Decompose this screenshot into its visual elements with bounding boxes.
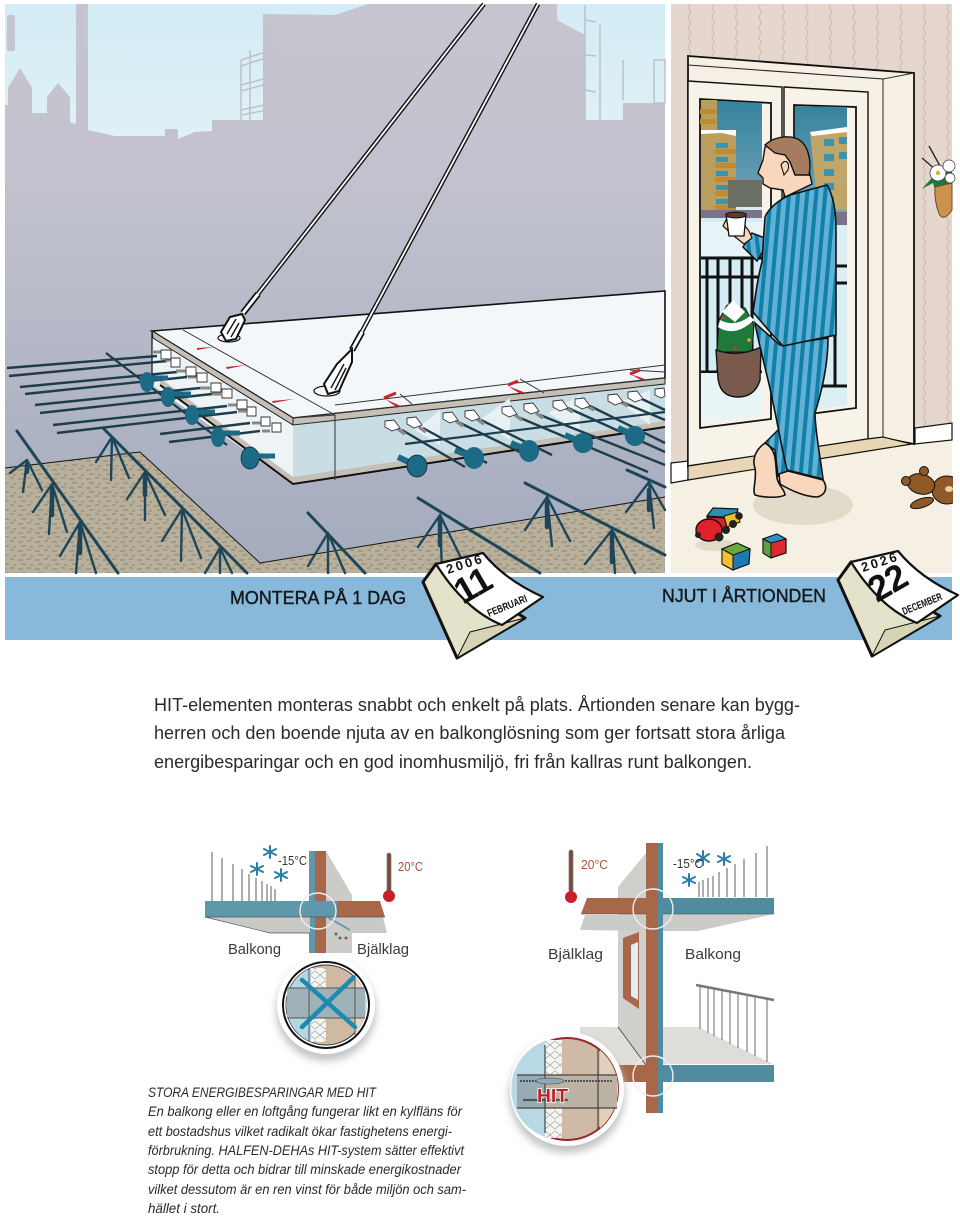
- right window view: [794, 105, 856, 416]
- label: balcony: Balkong: [228, 941, 281, 958]
- detail circle with cross: [276, 956, 376, 1061]
- label: floor slab: Bjälklag: [357, 941, 409, 958]
- intro paragraph: energibesparingar och en god inomhusmiljö, fri från kallras runt balkongen.: [154, 752, 752, 772]
- left window view: [700, 99, 771, 428]
- balcony railing top: [699, 846, 767, 897]
- city and building silhouette: [5, 4, 665, 573]
- label: outdoor temperature: -15°C: [673, 856, 703, 871]
- ear: [781, 161, 788, 175]
- text block: energy savings: hället i stort.: [148, 1201, 220, 1216]
- wall section: [309, 851, 352, 953]
- window opening: [623, 932, 639, 1009]
- detail circle with HIT connector: HIT: [537, 1086, 568, 1106]
- caption: mount in one day: MONTERA PÅ 1 DAG: [230, 588, 406, 608]
- calendar icon 2006: FEBRUARI: [486, 593, 529, 620]
- connection rings: [633, 889, 673, 1096]
- condensation drops: [334, 932, 348, 940]
- detail circle with HIT connector: [509, 1032, 625, 1153]
- wall column: [646, 843, 663, 1113]
- wallpaper: [671, 4, 952, 573]
- thermal bridge ring: [300, 893, 336, 929]
- top floor slab and balcony: [580, 898, 774, 931]
- pyjama lower leg: [765, 428, 792, 476]
- panel: indoor scene illustration: [671, 4, 960, 573]
- floor shadow: [753, 485, 853, 525]
- caption: enjoy for decades: NJUT I ÅRTIONDEN: [662, 586, 826, 606]
- text block: energy savings: förbrukning. HALFEN-DEHAs HIT-system sätter effektivt: [148, 1143, 465, 1158]
- hair: [765, 137, 810, 175]
- diagram: balcony without HIT: [205, 846, 423, 1061]
- bare feet: [754, 443, 785, 497]
- calendar icon 2026: [838, 549, 958, 656]
- calendar icon 2006: 11: [446, 558, 499, 612]
- intro paragraph: HIT-elementen monteras snabbt och enkelt på plats. Årtionden senare kan bygg-: [154, 695, 800, 715]
- wall plant in basket: [922, 146, 955, 217]
- calendar icon 2026: 2026: [859, 549, 901, 575]
- floor slab and balcony slab: [205, 901, 387, 933]
- icon: thermometer: [383, 853, 395, 902]
- label: outdoor temperature: -15°C: [278, 853, 307, 868]
- balcony railing lower: [696, 985, 774, 1062]
- balcony door frame: [688, 56, 914, 480]
- precast slab: [152, 291, 665, 484]
- snowflakes: [683, 851, 730, 886]
- text block: energy savings: stopp för detta och bidrar till minskade energikostnader: [148, 1162, 461, 1177]
- text block: energy savings: vilket dessutom är en ren vinst för både miljön och sam-: [148, 1182, 466, 1197]
- label: indoor temperature: 20°C: [398, 859, 423, 874]
- rebar bars and connectors: front side: [385, 388, 665, 477]
- intro paragraph: herren och den boende njuta av en balkonglösning som ger fortsatt stora årliga: [154, 723, 786, 743]
- label: floor slab: Bjälklag: [548, 946, 603, 963]
- text block: energy savings: En balkong eller en loftgång fungerar likt en kylfläns för: [148, 1104, 462, 1119]
- lower slab and balcony: [618, 1065, 774, 1082]
- lifting cables and hooks: [218, 4, 538, 396]
- hand and coffee cup: [723, 212, 752, 244]
- calendar icon 2026: DECEMBER: [901, 591, 944, 618]
- pyjama jacket: [753, 185, 836, 346]
- calendar icon 2006: [423, 551, 543, 658]
- label: indoor temperature: 20°C: [581, 857, 608, 872]
- intro paragraph: [154, 695, 800, 772]
- calendar icon 2006: 2006: [444, 551, 486, 577]
- potted christmas tree: [716, 300, 761, 397]
- icon: thermometer: [565, 850, 577, 903]
- balcony railing: [212, 852, 275, 901]
- pyjama trousers: [755, 323, 828, 479]
- snowflakes: [251, 846, 287, 881]
- diagram: balcony with HIT: [509, 843, 774, 1153]
- toy blocks: [722, 534, 786, 570]
- floor: [671, 440, 952, 573]
- sleeve: [743, 233, 770, 261]
- man in striped pyjamas: [723, 137, 853, 525]
- calendar icon 2026: 22: [860, 555, 914, 610]
- text block: energy savings: ett bostadshus vilket radikalt ökar fastighetens energi-: [148, 1124, 452, 1139]
- caption band: [5, 577, 952, 640]
- panel: construction site illustration: [5, 4, 665, 573]
- support props: [10, 428, 665, 573]
- text block: energy savings: [148, 1085, 466, 1216]
- subheading: STORA ENERGIBESPARINGAR MED HIT: [148, 1085, 378, 1100]
- sky background: [5, 4, 665, 144]
- ground concrete surface: [5, 452, 665, 573]
- wall section: [580, 853, 773, 1065]
- neck and face: [758, 140, 812, 197]
- teddy bear: [902, 466, 960, 515]
- toy train: [695, 508, 743, 551]
- rebar bars and connectors: left side: [7, 350, 281, 469]
- skirting boards: [671, 423, 952, 483]
- label: balcony: Balkong: [685, 946, 741, 963]
